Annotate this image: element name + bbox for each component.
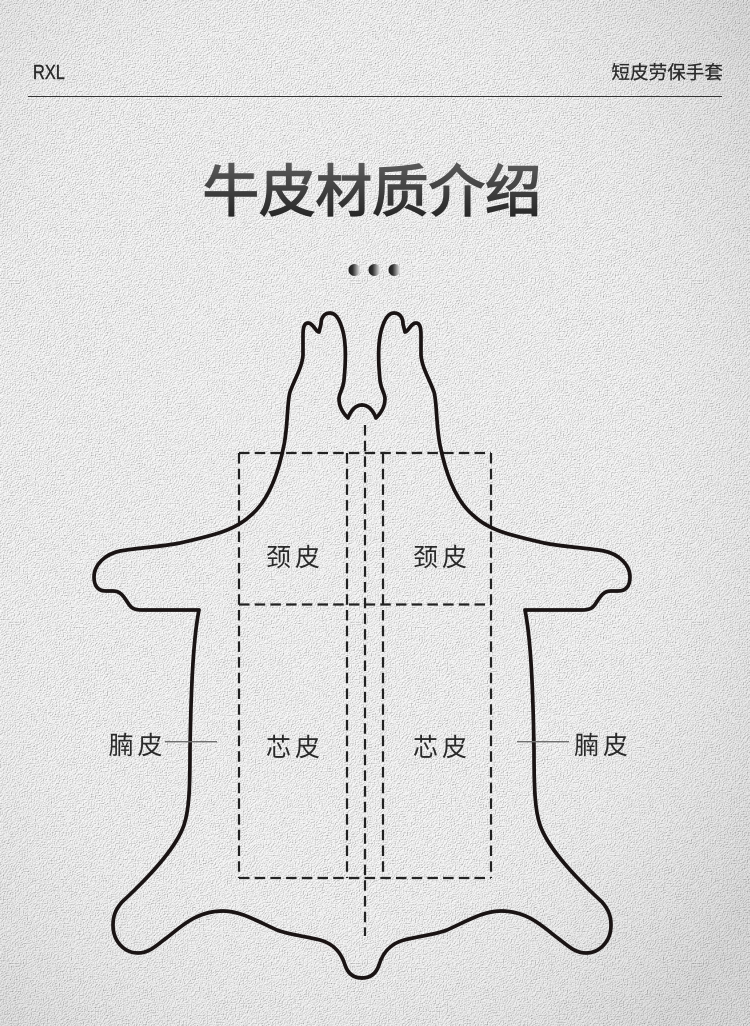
leader line: belly right: [517, 741, 569, 742]
label: core left: 芯皮: [266, 734, 324, 762]
icon: three gradient dots: [348, 264, 400, 276]
header: product name: 短皮劳保手套: [611, 62, 723, 83]
label: neck left: 颈皮: [266, 544, 324, 572]
cowhide outline: [94, 313, 630, 978]
dashed region grid: [239, 425, 491, 936]
label: core right: 芯皮: [413, 734, 471, 762]
title: 牛皮材质介绍: [202, 160, 542, 223]
leader line: belly left: [165, 741, 217, 742]
label: belly left: 腩皮: [108, 732, 167, 760]
label: neck right: 颈皮: [413, 544, 471, 572]
header divider: [28, 96, 722, 97]
header: brand name: RXL: [33, 60, 65, 83]
label: belly right: 腩皮: [574, 732, 632, 760]
